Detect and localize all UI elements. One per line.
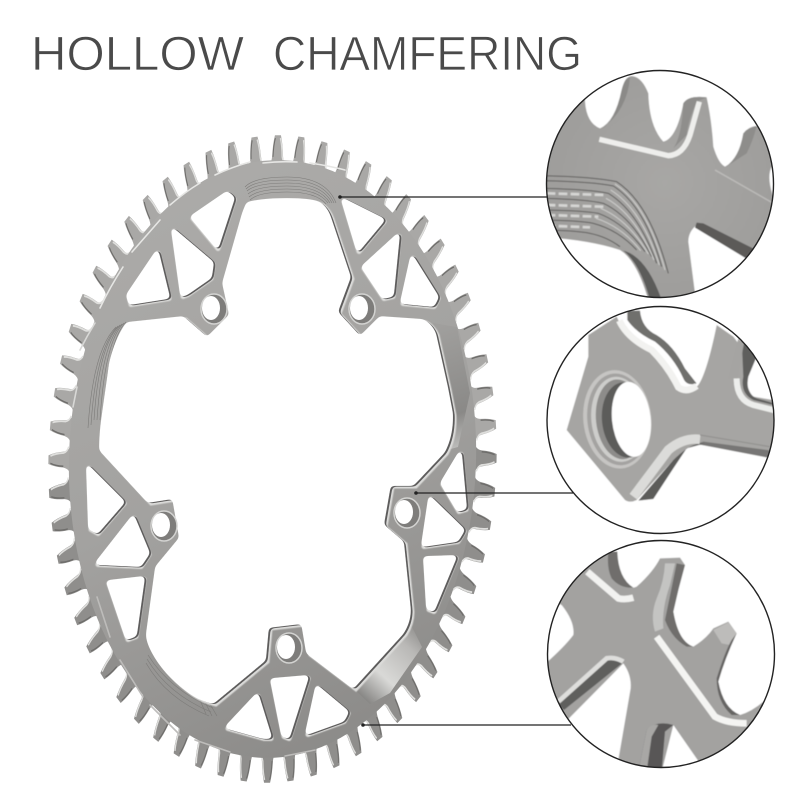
callout line 2 xyxy=(414,491,573,495)
callout line 1 xyxy=(338,195,547,199)
chainring xyxy=(35,124,510,794)
right chamfer band xyxy=(433,323,470,450)
detail circle 1: teeth and ridges xyxy=(546,70,774,298)
body shading xyxy=(59,153,486,765)
bottom right polished chamfer xyxy=(353,623,422,704)
title xyxy=(31,27,582,81)
detail circle 3: tooth root chamfer xyxy=(546,540,776,768)
chainring teeth and body xyxy=(35,124,510,794)
central opening xyxy=(100,199,455,705)
title: CHAMFERING xyxy=(273,27,582,81)
machined ridges xyxy=(88,177,336,716)
title: HOLLOW xyxy=(31,27,244,81)
callout line 3 xyxy=(361,723,571,727)
chamfer highlights under tooth roots xyxy=(73,162,345,756)
detail circle 2: bolt hole xyxy=(546,306,775,534)
lightening windows xyxy=(88,193,466,738)
bolt holes xyxy=(151,294,420,663)
